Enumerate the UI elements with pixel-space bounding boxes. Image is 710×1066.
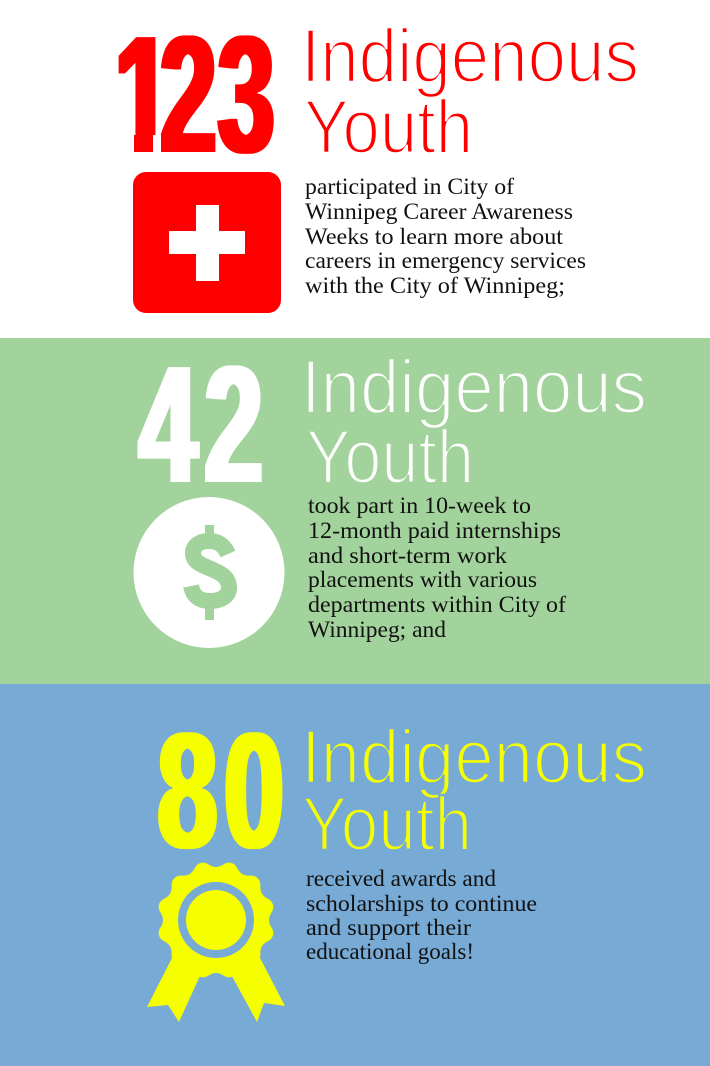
panel: paid internships <box>0 331 710 684</box>
heading: Indigenous Youth: Indigenous <box>301 14 639 99</box>
text: internships description: departments within City of <box>308 592 566 617</box>
text: career awareness description: Weeks to learn more about <box>305 224 564 249</box>
text: internships description: placements with various <box>308 567 537 592</box>
text: awards description <box>306 866 537 964</box>
text: internships description: 12-month paid internships <box>308 518 561 543</box>
text: career awareness description: with the City of Winnipeg; <box>305 273 565 298</box>
text: career awareness description <box>305 174 586 298</box>
icon: award ribbon <box>147 863 285 1022</box>
heading: Indigenous Youth: Youth <box>306 415 474 500</box>
text: internships description: took part in 10-week to <box>308 493 531 518</box>
icon: dollar coin <box>134 497 284 648</box>
text: career awareness description: Winnipeg Career Awareness <box>305 199 573 224</box>
text: career awareness description: participated in City of <box>305 174 514 199</box>
heading: Indigenous Youth: Youth <box>304 85 473 170</box>
heading: Indigenous Youth: Youth <box>302 782 472 867</box>
panel: career awareness <box>118 28 636 313</box>
heading: Indigenous Youth: Indigenous <box>301 715 647 800</box>
text: awards description: and support their <box>306 915 471 940</box>
text: awards description: scholarships to continue <box>306 891 537 916</box>
number: 42: 42 <box>139 331 263 518</box>
number: 123: 123 <box>115 2 274 188</box>
text: awards description: received awards and <box>306 866 497 891</box>
heading: Indigenous Youth <box>301 715 647 867</box>
icon: medical cross <box>133 172 281 313</box>
heading: Indigenous Youth: Indigenous <box>301 345 647 430</box>
text: career awareness description: careers in emergency services <box>305 248 586 273</box>
heading: Indigenous Youth <box>301 14 639 170</box>
text: internships description: and short-term work <box>308 543 508 568</box>
number: 80: 80 <box>158 699 284 883</box>
panel: awards and scholarships <box>0 684 710 1066</box>
text: internships description <box>308 493 566 642</box>
text: awards description: educational goals! <box>306 939 474 964</box>
heading: Indigenous Youth <box>301 345 647 500</box>
text: internships description: Winnipeg; and <box>308 617 447 642</box>
